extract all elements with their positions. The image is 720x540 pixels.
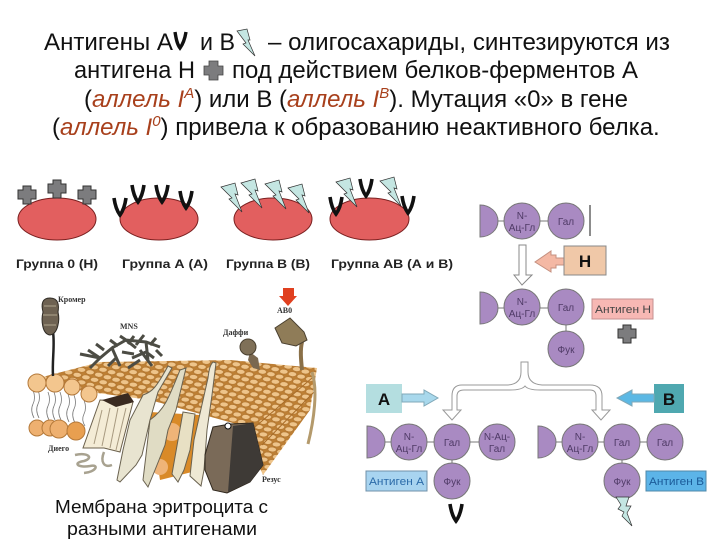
enzyme box H (564, 246, 606, 275)
membrane caption (55, 497, 268, 539)
chain: antigen A: Гал (489, 444, 505, 455)
enzyme box B: В (663, 390, 675, 409)
panel: group A cell: Группа А (А) (122, 257, 208, 271)
panel: group B cell (221, 179, 312, 271)
title text block: 0 (152, 113, 161, 130)
label: antigen H (592, 299, 653, 319)
title text block: антигена Н (74, 57, 195, 84)
title text block: ) привела к образованию неактивного белка. (161, 114, 660, 141)
title text block: и В (200, 29, 235, 56)
pink arrow from H (535, 251, 564, 272)
Rh protein (205, 423, 263, 493)
panel: group AB cell (330, 177, 453, 271)
chain: precursor (480, 203, 590, 239)
chain: antigen H: N- (517, 297, 527, 308)
enzyme box H: Н (579, 252, 591, 271)
panel: group 0 cell (16, 180, 98, 271)
icon: antigen B in title (237, 29, 255, 56)
icon: antigen A (450, 504, 462, 521)
icon: antigen H in title (204, 61, 223, 80)
panel: group AB cell: Группа АВ (А и В) (331, 257, 453, 271)
chain: precursor: Гал (558, 217, 574, 228)
label: antigen A: Антиген А (369, 476, 425, 488)
membrane illustration: Даффи (223, 328, 249, 337)
lipid tails (32, 390, 85, 426)
title text block: аллель I (287, 86, 380, 113)
branching hollow arrows (443, 362, 610, 420)
title text block (44, 29, 670, 141)
orange interior (150, 412, 200, 480)
membrane caption: разными антигенами (67, 519, 257, 539)
title text block: B (379, 85, 389, 102)
chain: precursor: N- (517, 211, 527, 222)
panel: group 0 cell: Группа 0 (Н) (16, 257, 98, 271)
chain: antigen B: N- (575, 432, 585, 443)
chain: antigen A: N-Ац- (484, 432, 510, 443)
glycoprotein strands (117, 362, 216, 487)
chain: antigen A (367, 424, 515, 499)
title text block: – олигосахариды, синтезируются из (268, 29, 670, 56)
icon: antigen H cross (618, 325, 636, 343)
chain: antigen H: Фук (558, 345, 575, 356)
chain: antigen B (538, 424, 683, 499)
icon: red arrow (279, 288, 297, 306)
membrane caption: Мембрана эритроцита с (55, 497, 268, 517)
label: antigen B (646, 471, 706, 491)
label: antigen H: Антиген Н (595, 304, 651, 316)
label: antigen B: Антиген В (649, 476, 704, 488)
label: antigen A (366, 471, 427, 491)
chain: antigen B: Фук (614, 477, 631, 488)
enzyme box A (366, 384, 402, 413)
chain: precursor: Ац-Гл (509, 223, 535, 234)
chain: antigen B: Ац-Гл (567, 444, 593, 455)
chain: antigen A: N- (404, 432, 414, 443)
membrane illustration (27, 288, 317, 493)
white band 3 protein (75, 393, 134, 473)
blue arrow from A (402, 390, 438, 406)
enzyme box B (654, 384, 684, 413)
MNS protein tree (80, 335, 162, 368)
membrane illustration: Резус (262, 475, 281, 484)
chain: antigen H (480, 289, 584, 367)
title text block: (аллель I (84, 86, 184, 113)
title text block: под действием белков-ферментов А (232, 57, 638, 84)
hollow down arrow (514, 245, 532, 285)
title text block: A (183, 85, 194, 102)
chain: antigen H: Гал (558, 303, 574, 314)
membrane illustration: АВ0 (277, 306, 292, 315)
membrane illustration: Диего (48, 444, 69, 453)
panel: group A cell (114, 185, 208, 271)
biosynthesis diagram (366, 203, 706, 526)
icon: antigen B (616, 497, 632, 526)
panel: group B cell: Группа В (В) (226, 257, 310, 271)
chain: antigen B: Гал (614, 438, 630, 449)
membrane illustration: MNS (120, 322, 138, 331)
chain: antigen H: Ац-Гл (509, 309, 535, 320)
Duffy protein (240, 339, 260, 370)
chain: antigen A: Фук (444, 477, 461, 488)
chain: antigen B: Гал (657, 438, 673, 449)
Kromer protein (42, 298, 59, 376)
ABO protein (275, 318, 315, 444)
lipid surface (27, 360, 317, 475)
title text block: (аллель I (52, 114, 152, 141)
icon: antigen A in title (175, 32, 186, 48)
title text block: ) или В ( (194, 86, 287, 113)
chain: antigen A: Гал (444, 438, 460, 449)
membrane illustration: Кромер (58, 295, 86, 304)
chain: antigen A: Ац-Гл (396, 444, 422, 455)
enzyme box A: А (378, 390, 390, 409)
blue arrow from B (617, 390, 654, 406)
title text block: ). Мутация «0» в гене (389, 86, 628, 113)
title text block: Антигены А (44, 29, 173, 56)
